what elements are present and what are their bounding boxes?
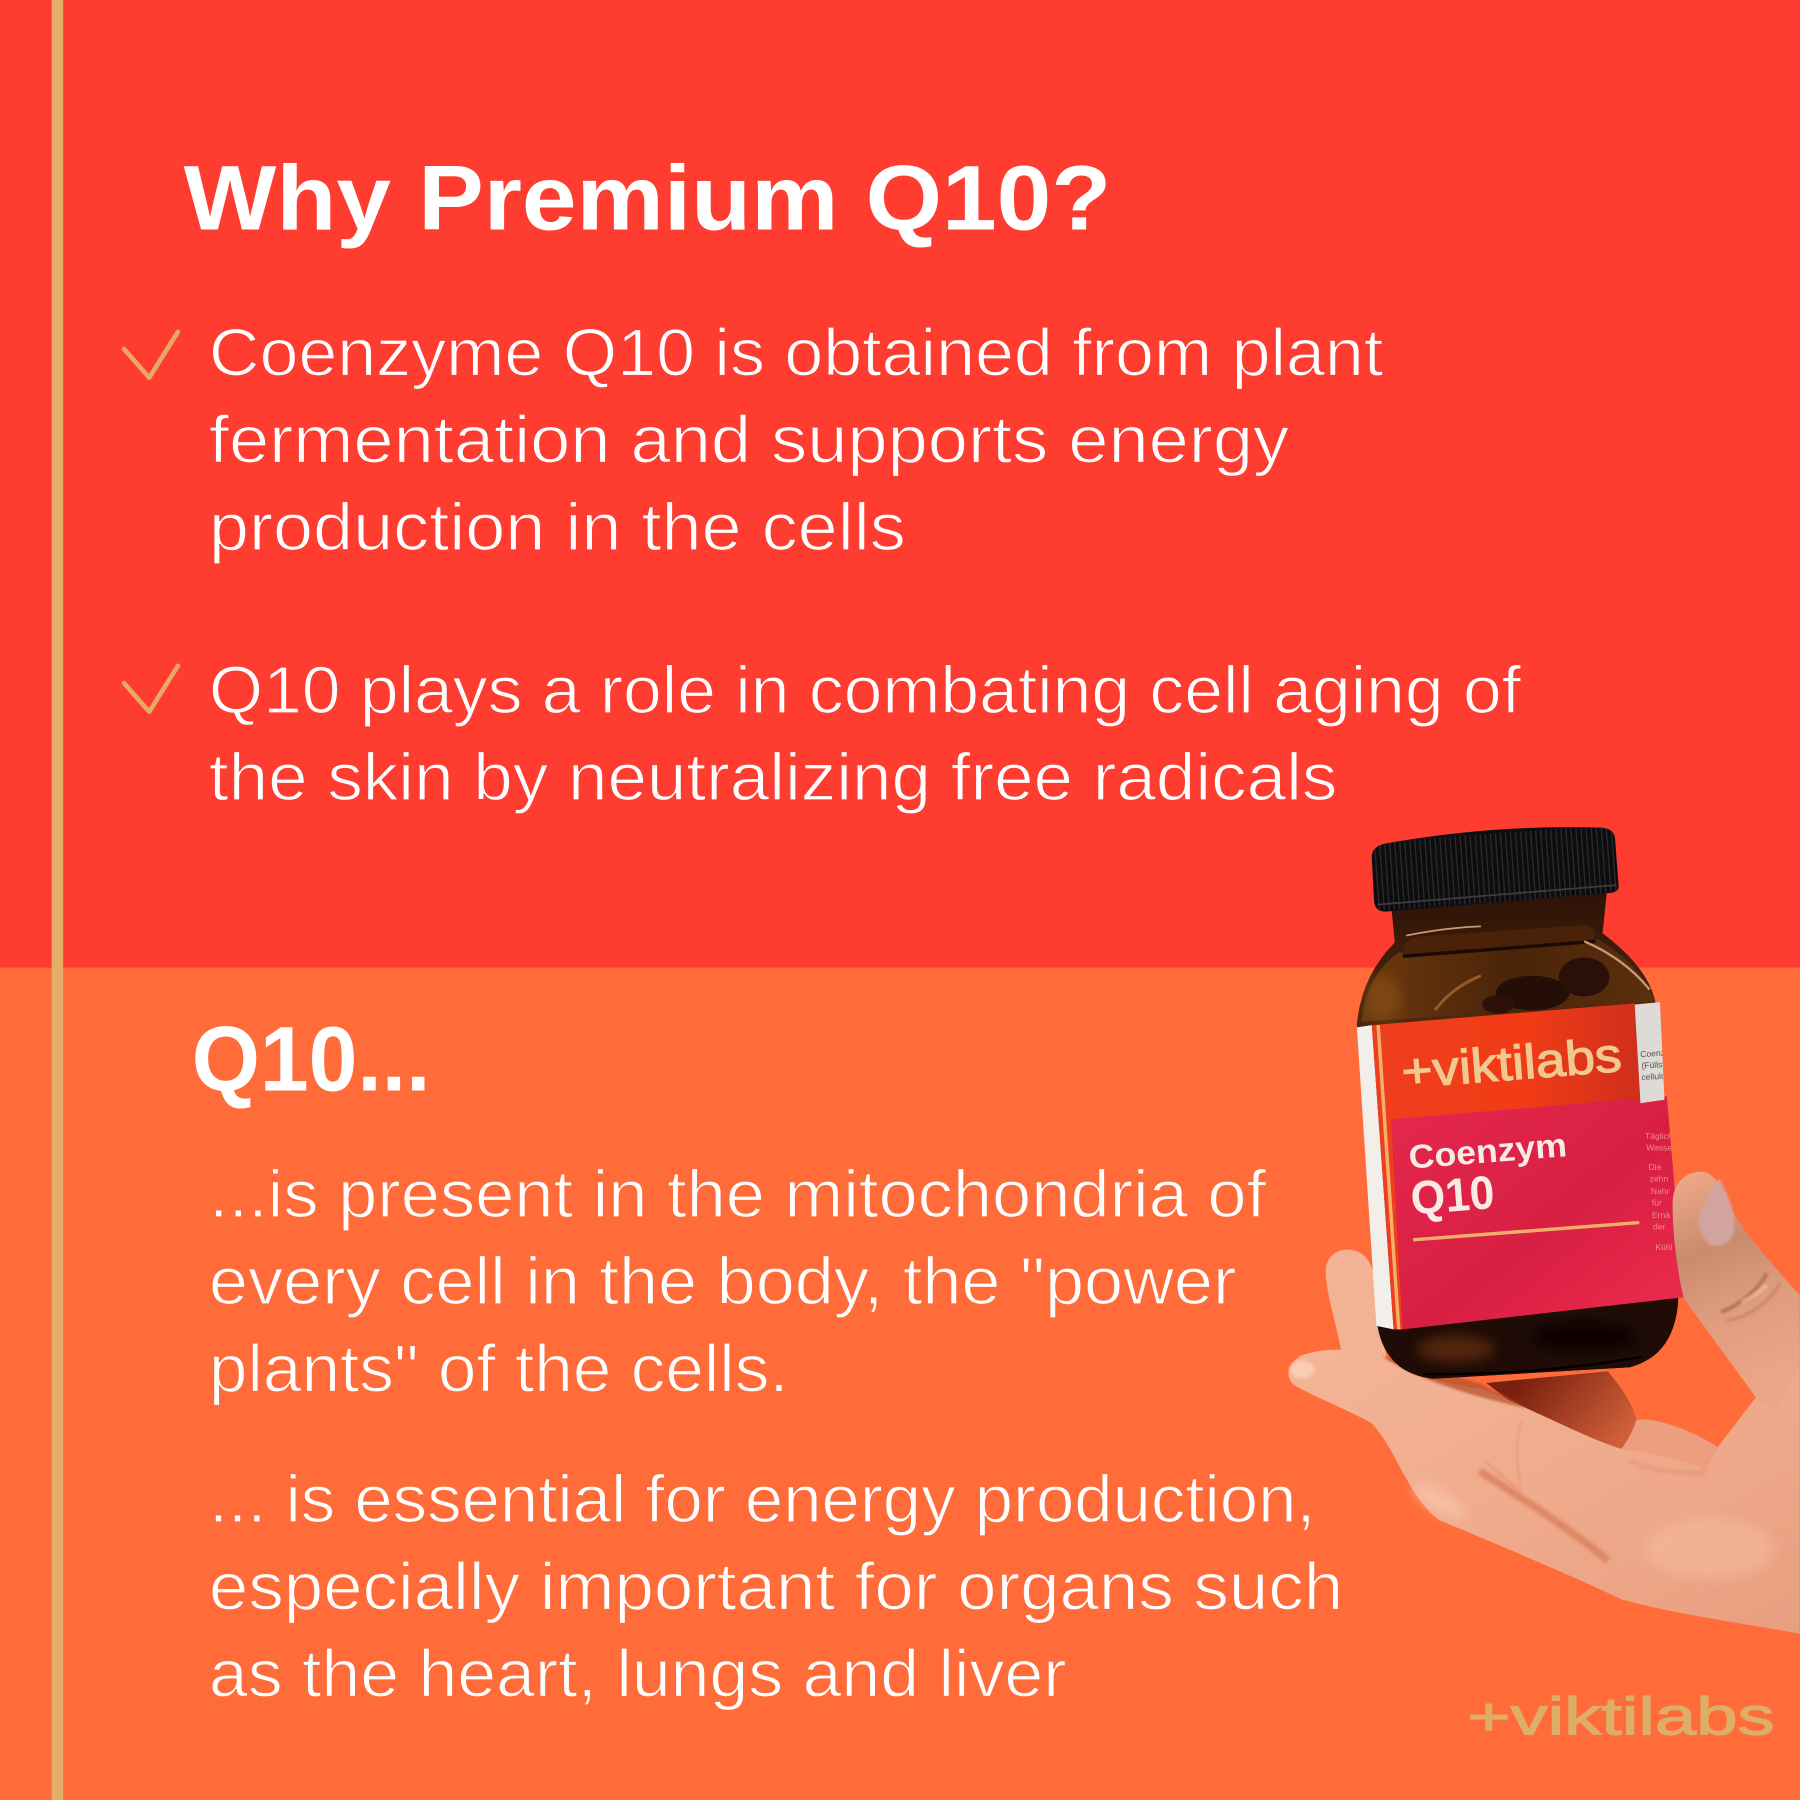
text block: energy production fact: ... is essential for energy production, [209,1463,1316,1537]
label: ingredients text: Coenzym [1640,1047,1677,1059]
icon: check mark one [124,332,178,378]
label: crimson lower band [1391,1096,1684,1329]
label: grey ingredients box [1635,1002,1665,1103]
hand: thumb with nail [1673,1172,1800,1413]
label: ingredients text: cellulose [1641,1070,1675,1082]
text block: mitochondria fact: plants" of the cells. [209,1332,789,1406]
panel: premium q10 background [0,0,1800,968]
label: brand name: +viktilabs [1399,1028,1623,1099]
text block: mitochondria fact: ...is present in the mitochondria of [209,1158,1267,1232]
label: ingredients text [1640,1051,1664,1080]
text block: plant fermentation benefit [209,316,1384,565]
product photo: hand holding bottle [1288,827,1800,1634]
label: directions text: Ernä [1652,1210,1670,1220]
gold vertical bar [52,0,63,1800]
label: product name q10: Q10 [1409,1165,1496,1225]
bottle: black ribbed cap [1366,827,1624,912]
label: directions text: zehn [1650,1173,1668,1183]
text block: plant fermentation benefit: fermentation and supports energy [209,404,1290,478]
text block: plant fermentation benefit: Coenzyme Q10 is obtained from plant [209,316,1384,390]
label: directions text: der [1653,1221,1666,1231]
label: directions text: Kühl [1655,1242,1673,1252]
label: directions text: für [1652,1197,1662,1207]
text block: mitochondria fact: every cell in the body, the "power [209,1245,1236,1319]
label: red upper band [1372,1003,1640,1329]
label: directions text: Täglich [1645,1131,1673,1141]
label: directions text: Nahr [1651,1186,1670,1196]
text block: cell aging benefit: Q10 plays a role in combating cell aging of [209,654,1522,728]
label: directions text: Die [1648,1162,1662,1172]
label: white side strip [1357,1025,1394,1329]
label: directions text: Wasser [1646,1142,1675,1152]
heading: q10: Q10... [192,1009,430,1111]
panel: q10 facts background [0,968,1800,1800]
label: gold stripe [1376,1025,1401,1329]
title: Why Premium Q10? [184,148,1111,250]
bottle: neck and shoulder detail [1361,925,1682,1383]
icon: check mark two [124,666,178,712]
text block: energy production fact: as the heart, lungs and liver [209,1638,1066,1712]
bottle: amber glass body [1357,890,1678,1379]
text block: energy production fact: especially important for organs such [209,1550,1343,1624]
text block: energy production fact [209,1463,1343,1712]
label: directions text [1645,1133,1672,1250]
text block: plant fermentation benefit: production in the cells [209,491,906,565]
label: product name coenzym: Coenzym [1407,1127,1568,1177]
text block: cell aging benefit: the skin by neutralizing free radicals [209,741,1337,815]
label: ingredients text: (Füllstoff [1641,1058,1675,1071]
text block: mitochondria fact [209,1158,1267,1406]
label: gold underline [1413,1223,1639,1240]
footer logo: +viktilabs [1467,1688,1775,1747]
text block: cell aging benefit [209,654,1522,815]
hand: palm and fingers [1288,1250,1800,1634]
